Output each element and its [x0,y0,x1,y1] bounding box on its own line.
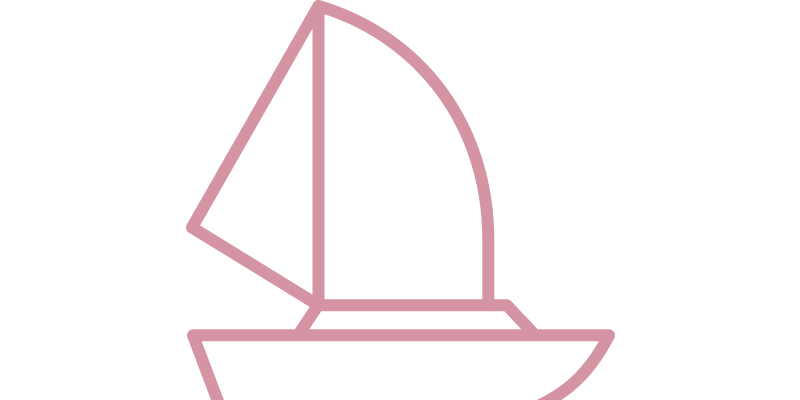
main sail and mast [318,6,488,305]
hull [193,335,609,400]
cabin [298,305,533,335]
jib sail [192,6,318,305]
